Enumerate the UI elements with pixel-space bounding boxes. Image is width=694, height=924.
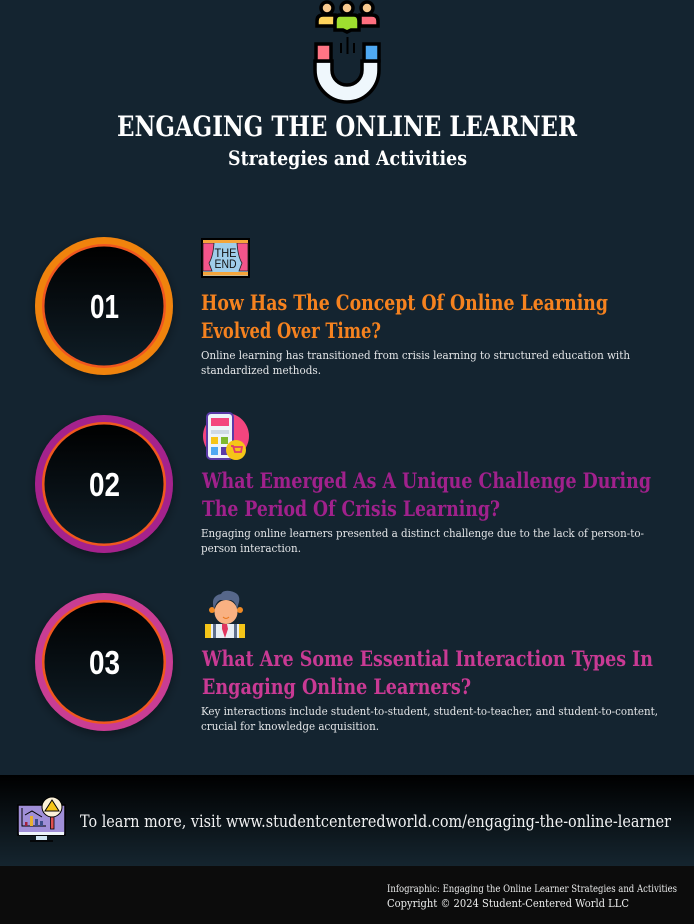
item 02 [35, 413, 651, 555]
description 01: standardized methods. [201, 363, 321, 377]
number badge 02 [35, 415, 173, 553]
heading 01: How Has The Concept Of Online Learning [201, 291, 608, 316]
item 03 [35, 591, 658, 733]
number badge 03: 03 [89, 644, 120, 681]
title: ENGAGING THE ONLINE LEARNER [117, 110, 578, 143]
heading 01: Evolved Over Time? [201, 319, 381, 344]
icon: teacher avatar [205, 591, 245, 638]
number badge 01 [35, 237, 173, 375]
heading 03: Engaging Online Learners? [202, 675, 471, 700]
icon: monitor with warning magnifier [18, 797, 65, 841]
icon: the end theatre curtain: END [214, 257, 237, 271]
number badge 03 [35, 593, 173, 731]
description 02: person interaction. [201, 541, 301, 555]
icon: shopping app on phone [203, 413, 249, 460]
copyright line: Copyright © 2024 Student-Centered World LLC [387, 896, 629, 910]
subtitle: Strategies and Activities [228, 146, 467, 170]
footer [0, 866, 694, 924]
icon: magnet attracting learners [315, 2, 379, 102]
description 02: Engaging online learners presented a distinct challenge due to the lack of person-to- [201, 526, 644, 540]
number badge 02: 02 [89, 466, 120, 503]
description 03: crucial for knowledge acquisition. [201, 719, 379, 733]
number badge 01: 01 [90, 288, 119, 325]
icon: the end theatre curtain [202, 239, 249, 277]
call to action band [0, 775, 694, 866]
item 01 [35, 237, 631, 377]
description 01: Online learning has transitioned from crisis learning to structured education with [201, 348, 631, 362]
icon: the end theatre curtain: THE [214, 246, 236, 260]
heading 02: The Period Of Crisis Learning? [202, 497, 500, 522]
